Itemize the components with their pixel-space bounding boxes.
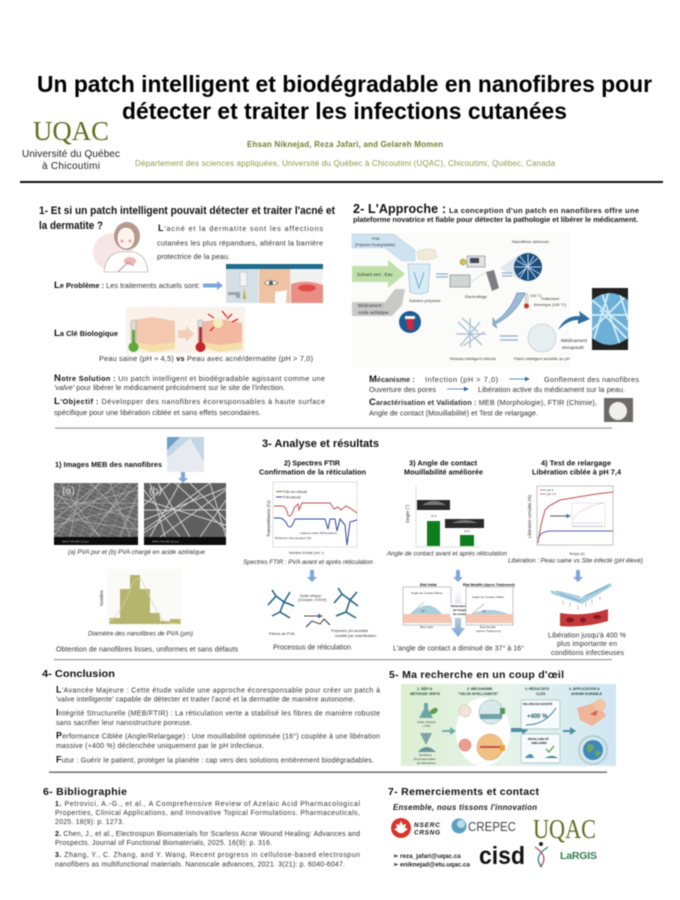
graphic: research summary: de Nanofibres: [417, 761, 436, 765]
image: SEM a: (a): [62, 485, 75, 497]
subheading: 3) Angle de contact: [409, 458, 478, 468]
chart: fibre diameter histogram: Nombre: [99, 589, 104, 606]
diagram: crosslinking: [268, 588, 376, 638]
reference 3: nanofibers as multifunctional materials. Nanoscale advances, 2021. 3(21): p. 6040-6047.: [55, 862, 345, 868]
text: encapsulated drug label: [561, 338, 588, 351]
reference 1: Properties, Clinical Applications, and Innovative Topical Formulations. Pharmaceuticals,: [55, 810, 360, 817]
chart: FTIR spectra: Réduction des groupes OH: [275, 536, 311, 540]
image: SEM b: (b): [149, 485, 162, 497]
graphic: research summary: CLÉS: [536, 691, 546, 696]
graphic: research summary: AMÉLIORÉE: [531, 740, 547, 745]
graphic: research summary: "VALVE INTELLIGENTE": [458, 692, 499, 696]
diagram: crosslinking: modifié par estérification: [335, 634, 376, 638]
icon: crosslinked network: Réseau intelligent réticulé: [450, 356, 497, 361]
text: intégrité structurelle: sans sacrifier leur nanostructure poreuse.: [56, 720, 192, 727]
icon: drug badge: [399, 311, 421, 333]
diagram: crosslinking: (Groupes -COOH): [298, 598, 326, 602]
diagram: arrow with treatment label: de l'angle: [453, 608, 466, 612]
reference 3: [55, 852, 360, 868]
diagram: arrow with treatment label: de contact: [453, 612, 467, 616]
icon: woman with irritated skin: [93, 222, 148, 272]
diagram: nanofibre production process: [352, 233, 628, 367]
icon: electrospinning device: Électrofilage: [465, 294, 488, 299]
image: encapsulated drug zoom: [592, 288, 628, 350]
text: intégrité structurelle: Intégrité Structurelle (MEB/FTIR) : La réticulation verte a stabilisé les fibres de manière robuste: [56, 708, 380, 718]
title: Un patch intelligent et biodégradable en nanofibres pour: [37, 71, 652, 97]
graphic: research summary: MOUILLABILITÉ: [528, 736, 549, 741]
diagram: modified state: 16°: [482, 609, 487, 613]
subheading: 1) Images MEB des nanofibres: [55, 460, 162, 469]
chart: FTIR spectra: Liaisons ester (Réticulation): [300, 531, 337, 535]
graphic: research summary: 2. MÉCANISME: [467, 686, 493, 691]
chart: contact angle bars: 16,3: [464, 529, 470, 533]
logo: UQAC: [22, 116, 120, 172]
caption: L'angle de contact a diminué de 37° à 16°: [393, 644, 524, 652]
text: pH comparison: Peau saine (pH ≈ 4,5) vs Peau avec acné/dermatite (pH > 7,0): [99, 354, 313, 363]
arrow: curved to encapsulated drug: [558, 311, 590, 330]
chart: FTIR spectra: Transmittance (%): [266, 500, 271, 537]
arrow: to network: [493, 293, 525, 328]
panel: bibliography: [43, 786, 360, 868]
text: avancée majeure: 'valve intelligente' capable de détecter et traiter l'acné et la dermatite de manière autonome.: [56, 696, 355, 704]
arrow: [203, 281, 223, 290]
diagram: crosslinking: Acide citrique: [300, 594, 321, 598]
logo: UQAC: UQAC: [533, 814, 596, 844]
title: détecter et traiter les infections cutanées: [122, 98, 567, 124]
diagram: arrow with treatment label: Diminution: [451, 604, 466, 608]
affiliation: Département des sciences appliquées, Université du Québec à Chicoutimi (UQAC), Chicoutimi, Québec, Canada: [135, 159, 556, 168]
text: notre solution: Notre Solution : Un patch intelligent et biodégradable agissant comme une: [54, 373, 325, 384]
diagram: initial state: État initial: [420, 624, 433, 629]
heading: acknowledgements: 7- Remerciements et contact: [388, 786, 540, 798]
sub-panel: contact angle: [386, 458, 524, 652]
text: avancée majeure: L'Avancée Majeure : Cette étude valide une approche écoresponsable pour créer un patch à: [56, 684, 380, 694]
heading: section 1: la dermatite ?: [39, 220, 103, 232]
image: patch photo: [604, 398, 633, 422]
heading: section 1: 1- Et si un patch intelligent pouvait détecter et traiter l'acné et: [39, 205, 335, 217]
heading: section 2: plateforme novatrice et fiable pour détecter la pathologie et libérer le médicament.: [353, 215, 638, 224]
panel: acknowledgements and contact: [388, 786, 597, 870]
arrow: drug: [352, 289, 405, 316]
chart: FTIR spectra: [266, 482, 357, 555]
caption: Processus de réticulation: [273, 644, 351, 652]
sub-panel: FTIR: [243, 458, 376, 652]
text: mécanisme: Infection (pH > 7,0): [425, 375, 498, 384]
graphic: research summary: RELARGAGE BOOSTÉ: [523, 701, 552, 706]
text: caractérisation: Caractérisation et Validation : MEB (Morphologie), FTIR (Chimie),: [369, 397, 597, 408]
arrow: drug: Acide azélaïque: [358, 310, 389, 315]
heading: section 3: 3- Analyse et résultats: [262, 438, 379, 450]
panel: section 3: [54, 437, 643, 657]
arrow down: [453, 570, 463, 582]
subheading: Mouillabilité améliorée: [404, 468, 483, 476]
icon: beaker: [408, 264, 441, 303]
caption: Libération : Peau saine vs Site infecté (pH élevé): [508, 558, 643, 564]
text: performance ciblée: Performance Ciblée (Angle/Relargage) : Une mouillabilité optimisée (16°) couplée à une libération: [56, 730, 380, 740]
contact emails: ➢ eniknejad@etu.uqac.ca: [393, 862, 470, 868]
graphic: research summary: 3. RÉSULTATS: [525, 686, 550, 691]
panel: conclusion: [42, 668, 380, 764]
caption: Diamètre des nanofibres de PVA (µm): [88, 630, 193, 638]
graphic: research summary: [401, 684, 616, 766]
reference 1: [55, 801, 360, 826]
panel: section 1: [39, 205, 335, 417]
diagram: modified state: (Après Traitement): [476, 629, 501, 633]
chart: cumulative release: pH 7,4: [547, 492, 556, 496]
heading: bibliography: 6- Bibliographie: [43, 786, 127, 798]
text: l'objectif: [54, 396, 325, 417]
chart: FTIR spectra: PVA non réticulé: [283, 490, 307, 494]
arrow: PVA input: (Polymère biodégradable): [355, 243, 395, 247]
authors: Ehsan Niknejad, Reza Jafari, and Gelareh Momen: [247, 140, 443, 149]
reference 1: 2025. 18(9): p. 1273.: [55, 819, 124, 826]
chart: cumulative release: Temps (h): [569, 552, 585, 556]
subheading: 2) Spectres FTIR: [284, 458, 341, 468]
text: futur: Futur : Guérir le patient, protéger la planète : cap vers des solutions entièrement biodégradables.: [56, 754, 374, 764]
image: healthy vs infected skin: [126, 307, 245, 353]
icon: nanofibre circle: Nanofibres obtenues: [512, 239, 549, 244]
text: introduction: L'acné et la dermatite sont les affections: [158, 223, 323, 233]
heading: section 2: La conception d'un patch en nanofibres offre une: [449, 206, 639, 215]
conclusion text: Obtention de nanofibres lisses, uniformes et sans défauts: [56, 646, 238, 654]
logo: cisd: cisd: [479, 842, 525, 870]
logo: NSERC: NSERC: [414, 822, 440, 829]
title: [37, 71, 652, 124]
logo: CREPEC: CREPEC: [468, 819, 516, 834]
diagram: initial state: [403, 582, 451, 629]
image: SEM a: [54, 483, 138, 545]
diagram: initial state: État initial: [420, 582, 437, 587]
text: avancée majeure: [56, 684, 380, 704]
text: introduction: protectrice de la peau.: [157, 252, 230, 261]
chart: contact angle bars: 37,3: [431, 514, 437, 518]
text: notre solution: 'valve' pour libérer le médicament précisément sur le site de l'infection.: [54, 383, 285, 392]
icon: thermometer and heat treatment: Traitement: [541, 297, 560, 301]
chart: cumulative release: Libération cumulée (%): [527, 494, 532, 538]
image: fibre photo: [167, 437, 204, 472]
icon: smart patch: Patch intelligent sensible au pH: [514, 356, 570, 361]
image: SEM b: [144, 483, 226, 545]
contact emails: [393, 853, 470, 868]
subheading: 4) Test de relargage: [541, 458, 611, 468]
graphic: research summary: Acide Citrique: [417, 720, 436, 724]
text: l'objectif: L'Objectif : Développer des nanofibres écoresponsables à haute surface: [54, 396, 325, 407]
reference 2: Prospects. Journal of Functional Biomaterials, 2025. 16(9): p. 316.: [55, 840, 272, 847]
arrow: green solvent: [352, 260, 405, 288]
icon: crosslinked network: [450, 318, 497, 361]
text: release result: conditions infectieuses: [551, 650, 624, 657]
caption: Angle de contact avant et après réticulation: [386, 550, 507, 558]
chart: fibre diameter histogram: [99, 569, 182, 625]
subheading: Confirmation de la réticulation: [259, 468, 366, 476]
arrow down: [178, 472, 188, 483]
diagram: crosslinking: Fibres de PVA: [269, 631, 295, 636]
chart: contact angle bars: [405, 486, 484, 547]
text: mécanisme: Mécanisme :: [369, 374, 415, 385]
text: performance ciblée: massive (+400 %) déclenchée uniquement par le pH infectieux.: [56, 743, 264, 750]
icon: electrospinning device: [450, 256, 499, 299]
graphic: research summary: AVENIR DURABLE: [571, 692, 603, 696]
arrow: PVA input: PVA: [372, 236, 380, 241]
text: mécanisme: Gonflement des nanofibres: [544, 375, 639, 384]
arrow down: [307, 570, 317, 582]
arrow: green solvent: Solvant vert : Eau: [357, 272, 393, 277]
text: introduction: cutanées les plus répandues, altérant la barrière: [157, 238, 323, 248]
graphic: research summary: Écoresponsable: [414, 756, 436, 761]
sub-panel: release test: [508, 458, 643, 657]
caption: (a) PVA pur et (b) PVA chargé en acide azélaïque: [68, 549, 205, 556]
graphic: research summary: + PVA: [422, 724, 430, 728]
diagram: crosslinking: Polymère pH-sensible: [331, 629, 368, 633]
image: SEM b: 20KV X5,000 10 µm: [152, 540, 179, 544]
arrow: PVA input: [352, 234, 415, 261]
image: SEM a: 20KV X5,000 10 µm: [62, 540, 89, 544]
chart: contact angle bars: Degré (°): [405, 504, 410, 523]
diagram: initial state: 37°: [421, 609, 426, 613]
logo: DNA: [535, 842, 548, 867]
text: mécanisme: [369, 374, 639, 394]
text: le problème: Le Problème : Les traitements actuels sont:: [54, 280, 200, 291]
chart: cumulative release: pH 4: [547, 488, 554, 492]
graphic: research summary: Synthèse: [419, 753, 432, 757]
caption: Spectres FTIR : PVA avant et après réticulation: [243, 559, 373, 566]
icon: nanofibre circle: [512, 239, 549, 281]
heading: conclusion: 4- Conclusion: [42, 668, 115, 680]
subheading: [404, 458, 483, 476]
icon: thermometer and heat treatment: thermique (100 °C): [534, 303, 567, 307]
heading: at a glance: 5- Ma recherche en un coup d'œil: [389, 669, 564, 681]
text: release result: plus importante en: [557, 641, 617, 648]
logo: CREPEC: [452, 818, 516, 834]
text: introduction: [157, 223, 323, 261]
text: release result: Libération jusqu'à 400 %: [548, 632, 626, 640]
sub-panel: MEB images: [54, 437, 238, 654]
image: current treatments: [226, 264, 323, 303]
text: mécanisme: Ouverture des pores: [369, 385, 436, 394]
chart: cumulative release: [527, 486, 613, 556]
logo: NSERC: [391, 818, 440, 838]
heading: section 2: [353, 202, 639, 224]
subheading: [532, 458, 622, 476]
text: intégrité structurelle: [56, 708, 380, 727]
subheading: [259, 458, 366, 476]
reference 2: [55, 831, 360, 847]
icon: thermometer and heat treatment: 100 °C: [530, 294, 542, 298]
icon: thermometer and heat treatment: [524, 294, 567, 308]
graphic: research summary: +400 %: [527, 714, 548, 720]
icon: smart patch: [514, 324, 570, 361]
graphic: research summary: 4. APPLICATION &: [569, 687, 600, 691]
logo: NSERC: CRSNG: [414, 830, 440, 836]
reference 3: 3. Zhang, Y., C. Zhang, and Y. Wang, Recent progress in cellulose-based electrospun: [55, 852, 360, 859]
diagram: modified state: Angle de Contact Faible: [472, 595, 504, 599]
heading: section 2: 2- L'Approche :: [353, 202, 446, 216]
panel: at a glance: [389, 669, 616, 766]
text: release result: [548, 632, 626, 657]
chart: FTIR spectra: Nombre d'onde (cm⁻¹): [289, 551, 324, 555]
graphic: research summary: MÉTHODE VERTE: [410, 691, 441, 696]
text: caractérisation: Angle de contact (Mouillabilité) et Test de relargage.: [369, 408, 538, 418]
arrow: drug: Médicament :: [358, 303, 384, 308]
text: notre solution: [54, 373, 325, 392]
icon: beaker: Solution préparée: [409, 298, 441, 303]
icon: fibres releasing drug into vessel: [550, 583, 612, 626]
logo: UQAC: Université du Québec: [22, 149, 120, 160]
reference 1: 1. Petrovici, A.-G., et al., A Comprehensive Review of Azelaic Acid Pharmacological: [55, 801, 360, 808]
chart: FTIR spectra: PVA réticulé: [283, 496, 301, 500]
graphic: research summary: 1. DÉFI &: [417, 686, 433, 691]
diagram: initial state: Angle de Contact Élevé: [411, 590, 443, 595]
logo: LaRGIS: LaRGIS: [560, 850, 597, 862]
diagram: arrow with treatment label: [450, 590, 467, 637]
diagram: modified state: [463, 582, 515, 633]
tagline: Ensemble, nous tissons l'innovation: [393, 803, 537, 812]
text: performance ciblée: [56, 730, 380, 750]
logo: UQAC: à Chicoutimi: [42, 161, 100, 172]
text: encapsulated drug label: Médicament: [561, 338, 588, 344]
diagram: modified state: État Mouillé: [480, 624, 496, 629]
text: mécanisme: Libération active du médicament sur la peau.: [478, 385, 625, 394]
text: l'objectif: spécifique pour une libération ciblée et sans effets secondaires.: [54, 408, 261, 417]
panel: section 2: [352, 202, 639, 422]
subheading: Libération ciblée à pH 7,4: [532, 468, 622, 476]
reference 2: 2. Chen, J., et al., Electrospun Biomaterials for Scarless Acne Wound Healing: Advances and: [55, 831, 360, 838]
contact emails: ➢ reza_jafari@uqac.ca: [393, 853, 461, 860]
text: encapsulated drug label: encapsulé: [562, 345, 584, 351]
icon: powder: [417, 249, 437, 260]
arrow down: [573, 570, 583, 582]
diagram: modified state: État Modifié (Après Traitement): [463, 582, 515, 587]
text: caractérisation: [369, 397, 597, 418]
logo: UQAC: UQAC: [33, 116, 109, 146]
heading: section 1: [39, 205, 335, 232]
text: la clé biologique: La Clé Biologique: [54, 328, 118, 339]
